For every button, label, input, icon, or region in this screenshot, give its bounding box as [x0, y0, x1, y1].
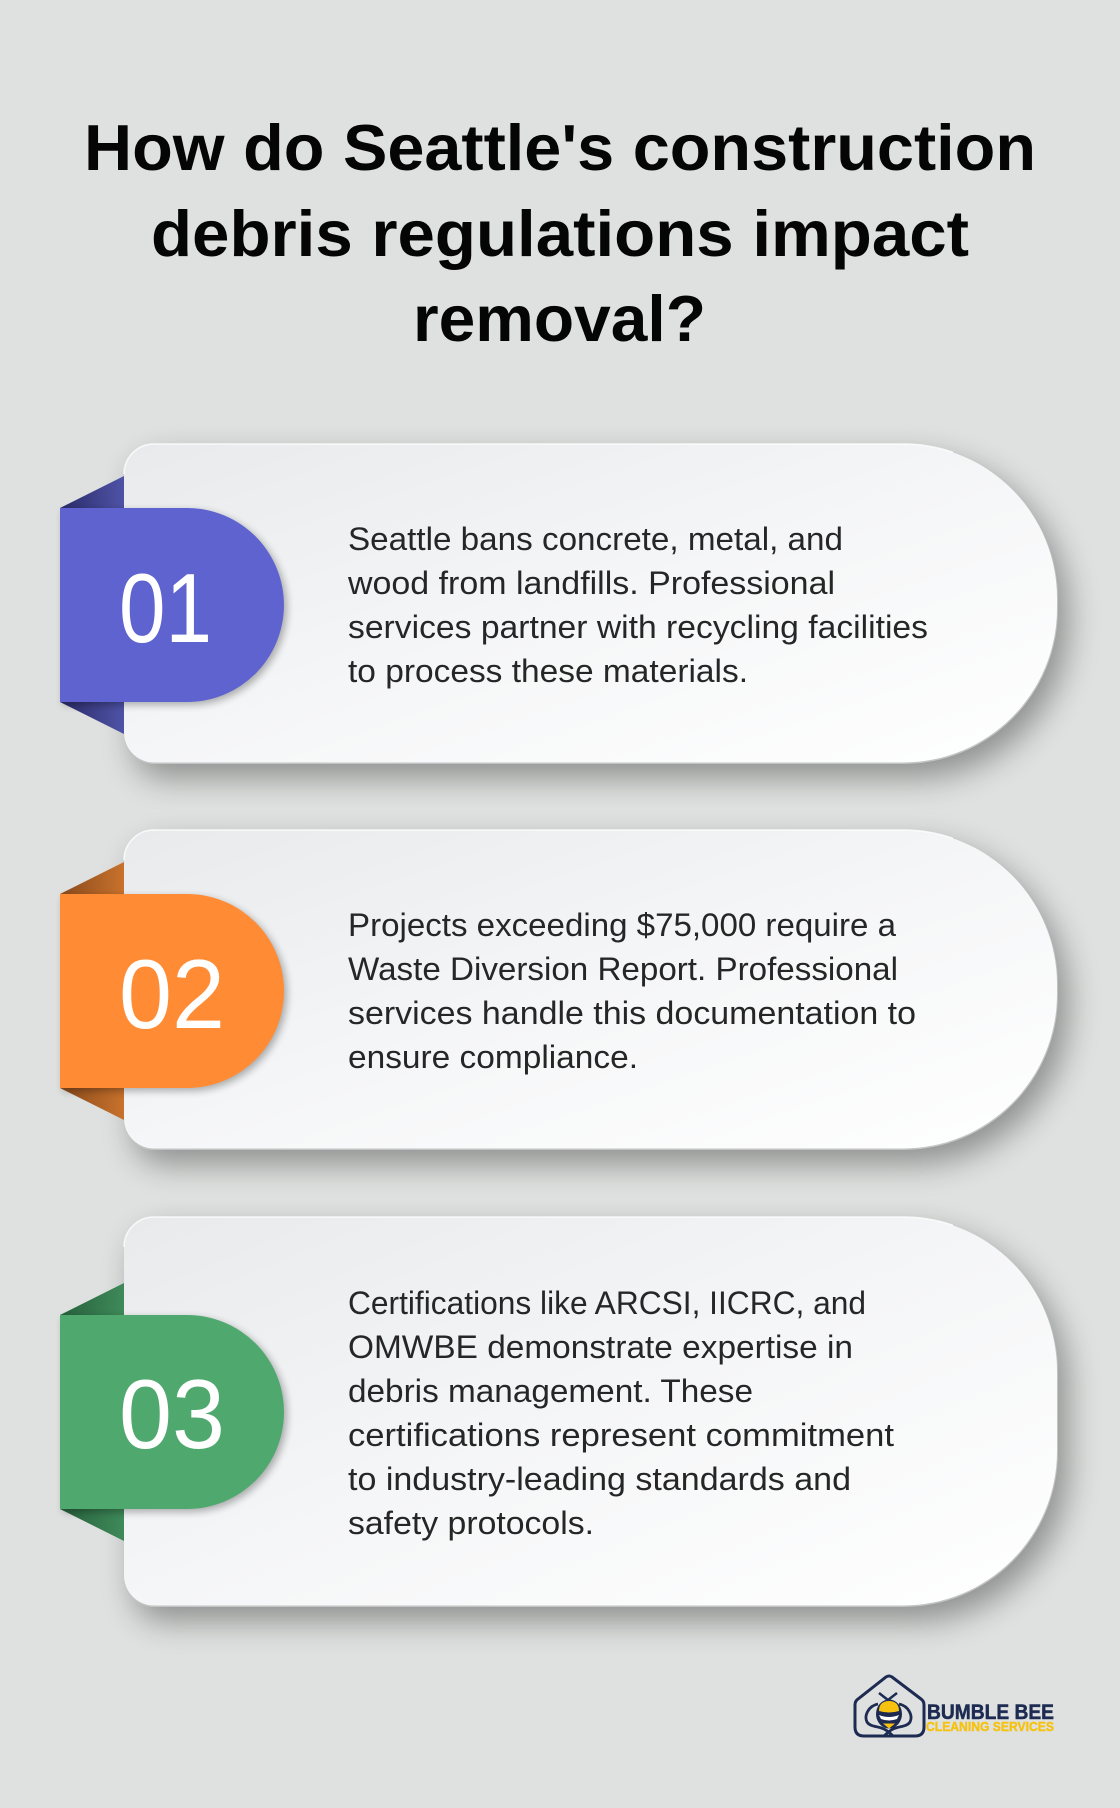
title: debris regulations impact: [151, 197, 969, 270]
logo text: BUMBLE BEE: [927, 1701, 1054, 1724]
number 03: 03: [119, 1359, 225, 1469]
card 1: [124, 444, 1068, 778]
text 1: Seattle bans concrete, metal, and: [348, 521, 843, 557]
text 2: ensure compliance.: [348, 1039, 638, 1075]
title: [84, 111, 1036, 355]
text 1: to process these materials.: [348, 653, 748, 689]
logo: Bumble Bee Cleaning Services: [855, 1676, 1054, 1736]
text 3: [348, 1285, 894, 1541]
ribbon 2: [60, 862, 287, 1120]
panel: step 1: [60, 444, 1068, 778]
icon: house with bee: [855, 1676, 924, 1736]
text 3: debris management. These: [348, 1373, 753, 1409]
text 2: Projects exceeding $75,000 require a: [348, 907, 897, 943]
text 3: certifications represent commitment: [348, 1417, 894, 1453]
text 2: [348, 907, 916, 1075]
text 2: services handle this documentation to: [348, 995, 916, 1031]
text 3: safety protocols.: [348, 1505, 594, 1541]
text 2: Waste Diversion Report. Professional: [348, 951, 898, 987]
number 02: 02: [119, 939, 225, 1049]
text 3: to industry-leading standards and: [348, 1461, 851, 1497]
text 1: wood from landfills. Professional: [347, 565, 835, 601]
card 2: [124, 830, 1068, 1164]
title: How do Seattle's construction: [84, 111, 1036, 184]
card 3: [124, 1217, 1068, 1621]
logo text: CLEANING SERVICES: [926, 1720, 1054, 1734]
number 01: 01: [119, 553, 212, 663]
ribbon 1: [60, 476, 287, 734]
panel: step 2: [60, 830, 1068, 1164]
title: removal?: [413, 282, 706, 355]
text 1: [347, 521, 928, 689]
panel: step 3: [60, 1217, 1068, 1621]
text 3: OMWBE demonstrate expertise in: [348, 1329, 853, 1365]
text 1: services partner with recycling facilities: [348, 609, 928, 645]
ribbon 3: [60, 1283, 287, 1541]
logo text: [926, 1701, 1054, 1734]
text 3: Certifications like ARCSI, IICRC, and: [348, 1285, 866, 1321]
